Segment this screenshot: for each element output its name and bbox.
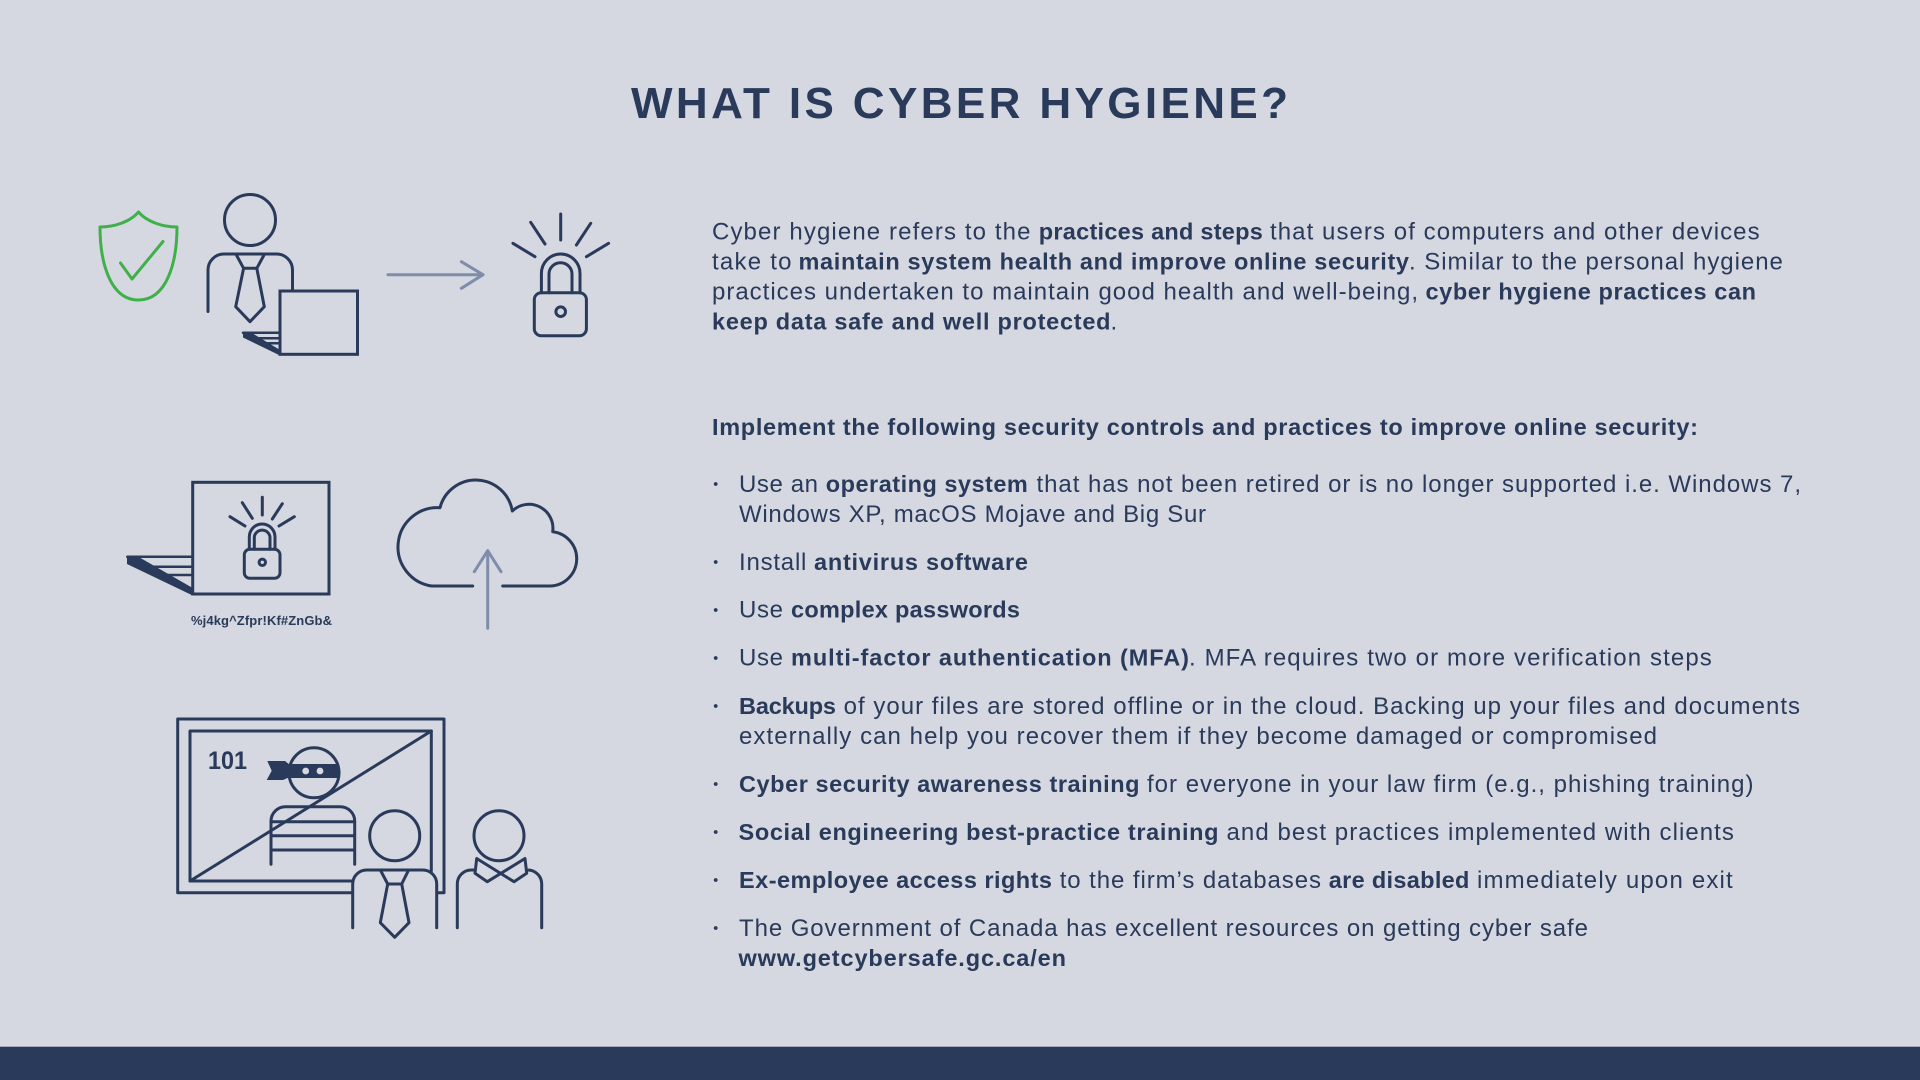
attendee with tie <box>353 811 437 937</box>
icon: laptop with padlock <box>127 482 329 596</box>
bullet: awareness training: Cyber security awareness training <box>739 771 1140 797</box>
footer bar <box>0 1047 1920 1080</box>
bullet: ex-employee access <box>714 867 1733 894</box>
icon: green shield with check <box>100 212 177 300</box>
intro paragraph: maintain system health and improve online security <box>798 248 1409 274</box>
bullet: operating system: Use an <box>739 471 818 498</box>
bullet: social engineering: and best practices implemented with clients <box>1226 819 1734 846</box>
bullet: social engineering: Social engineering best-practice training <box>738 819 1218 845</box>
bullet: backups: Backups <box>739 693 836 719</box>
hacker with mask <box>267 748 355 864</box>
bullet: MFA <box>714 645 1712 672</box>
icon: cloud outline <box>398 480 577 586</box>
bullet: antivirus <box>714 549 1028 576</box>
bullet: ex-employee access: to the firm’s databases <box>1060 867 1321 894</box>
bullet: operating system <box>714 471 1801 528</box>
intro paragraph: take to <box>712 248 792 276</box>
checklist of practices <box>714 471 1801 971</box>
bullet: MFA: multi-factor authentication (MFA) <box>791 645 1189 671</box>
icon: training screen with hacker and two attendees <box>178 719 542 937</box>
bullet: antivirus: antivirus software <box>814 549 1028 575</box>
attendee with bow tie <box>457 811 542 928</box>
bullet: backups: of your files are stored offline or in the cloud. Backing up your files and documents <box>844 693 1800 720</box>
intro paragraph <box>712 218 1783 336</box>
intro paragraph: . Similar to the personal hygiene <box>1409 248 1783 276</box>
bullet: ex-employee access: Ex-employee access rights <box>739 867 1052 893</box>
bullet: MFA: Use <box>739 645 783 672</box>
bullet: social engineering <box>714 819 1734 846</box>
screen frames <box>178 719 444 893</box>
section heading: Implement the following security controls and practices to improve online security: <box>712 414 1698 440</box>
bullet: awareness training <box>714 771 1753 798</box>
bullet: operating system: operating system <box>826 471 1028 497</box>
bullet: government resources <box>714 915 1588 971</box>
intro paragraph: Cyber hygiene refers to the <box>712 218 1030 246</box>
bullet: operating system: Windows XP, macOS Mojave and Big Sur <box>739 501 1206 528</box>
bullet: government resources: The Government of Canada has excellent resources on getting cyber safe <box>739 915 1588 942</box>
arrow: person to lock <box>388 262 483 288</box>
intro paragraph: that users of computers and other devices <box>1270 218 1760 246</box>
icon: person with tie at laptop <box>208 194 358 356</box>
bullet: MFA: . MFA requires two or more verification steps <box>1189 645 1712 672</box>
intro paragraph: keep data safe and well protected <box>712 308 1110 334</box>
bullet: antivirus: Install <box>739 549 806 576</box>
bullet: backups <box>714 693 1800 750</box>
bullet: ex-employee access: are disabled <box>1329 867 1469 893</box>
arrow: upload to cloud <box>474 551 501 628</box>
intro paragraph: cyber hygiene practices can <box>1426 278 1756 304</box>
bullet: operating system: that has not been retired or is no longer supported i.e. Windows 7, <box>1036 471 1801 498</box>
intro paragraph: practices undertaken to maintain good health and well-being, <box>712 278 1418 306</box>
bullet: passwords: complex passwords <box>791 596 1020 622</box>
icon: padlock with rays <box>513 214 609 336</box>
bullet: passwords: Use <box>739 596 783 624</box>
intro paragraph: practices and steps <box>1039 218 1263 244</box>
title: WHAT IS CYBER HYGIENE? <box>631 79 1288 128</box>
bullet: awareness training: for everyone in your law firm (e.g., phishing training) <box>1147 771 1754 798</box>
label 101: 101 <box>208 747 247 775</box>
bullet: government resources: www.getcybersafe.gc.ca/en <box>738 945 1066 971</box>
bullet: backups: externally can help you recover them if they become damaged or compromised <box>739 723 1657 750</box>
intro paragraph: . <box>1110 308 1117 336</box>
password caption: %j4kg^Zfpr!Kf#ZnGb& <box>191 613 332 628</box>
bullet: ex-employee access: immediately upon exit <box>1477 867 1733 894</box>
